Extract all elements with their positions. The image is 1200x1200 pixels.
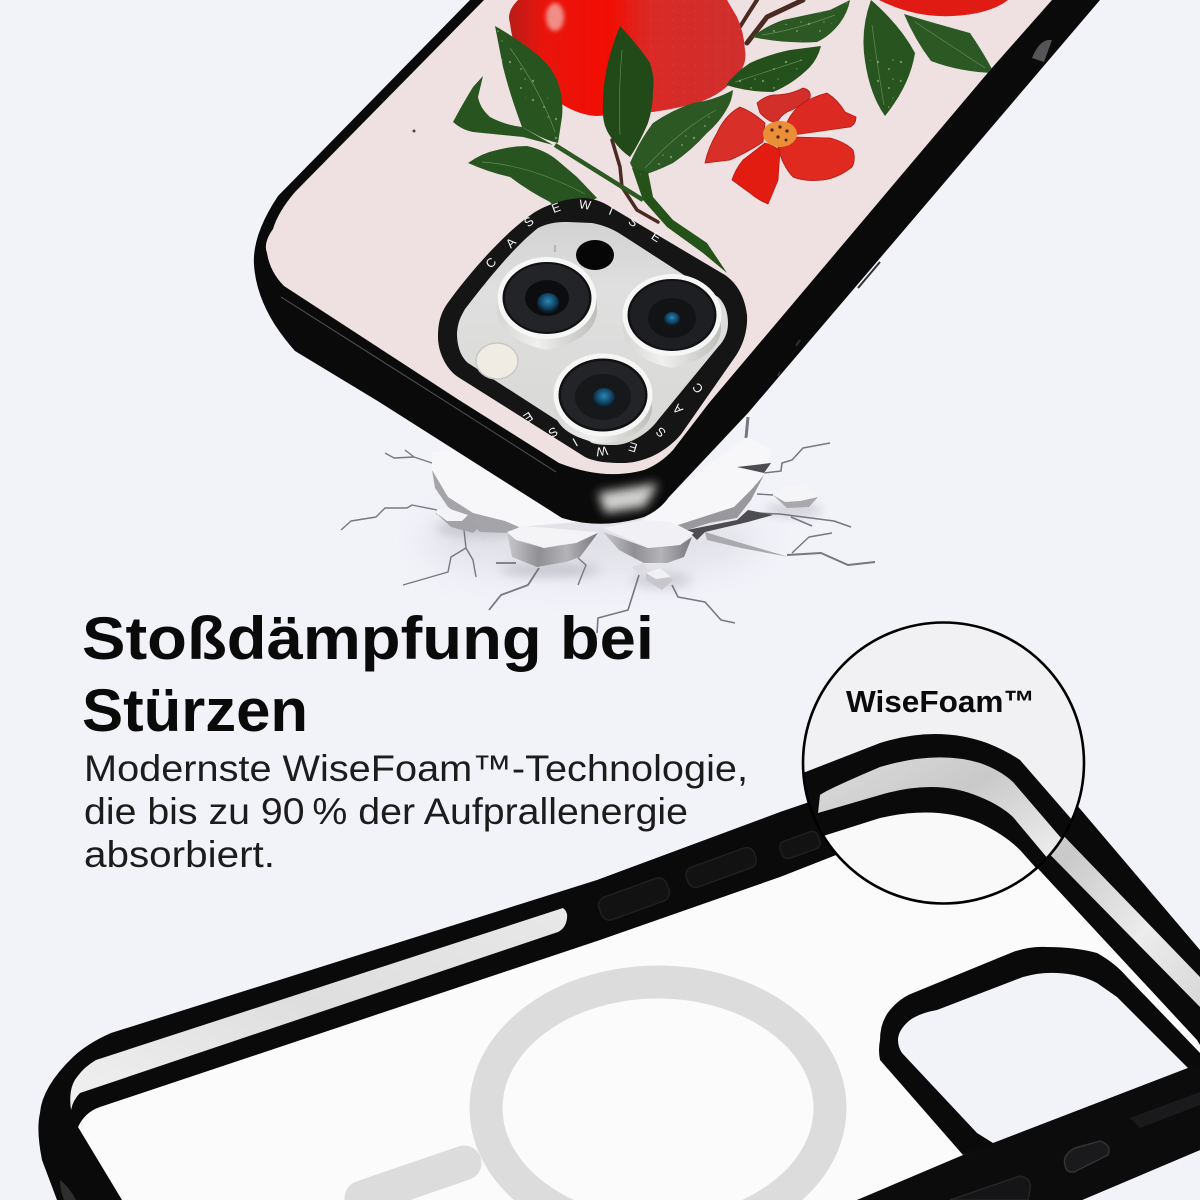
floor slab: upper left xyxy=(432,440,600,527)
leaf speckle xyxy=(495,0,915,177)
fruit grain xyxy=(628,2,740,110)
leaf curled left xyxy=(453,76,553,145)
petal lower right xyxy=(778,137,854,181)
microphone hole xyxy=(576,240,614,270)
petal top xyxy=(757,88,810,123)
upper phone with case xyxy=(254,0,1100,524)
camera cutout rim xyxy=(879,947,1200,1155)
case black frame silhouette xyxy=(38,760,1200,1200)
leaf upper left xyxy=(495,26,562,143)
camera plate mark xyxy=(554,245,556,252)
bottom button xyxy=(950,1176,1030,1200)
callout: magnified WiseFoam rim xyxy=(802,621,1086,905)
petal upper right xyxy=(787,93,856,135)
frame edge shine xyxy=(281,297,556,472)
CASEWISE ring lettering: C xyxy=(690,380,706,396)
CASEWISE ring lettering: C xyxy=(483,255,499,271)
CASEWISE ring lettering: W xyxy=(578,197,592,213)
fruit highlight xyxy=(546,3,564,31)
stem leaf xyxy=(632,168,727,273)
leaf veins xyxy=(482,15,985,194)
phone metal camera plate xyxy=(457,222,728,445)
petal left xyxy=(705,107,765,163)
pomegranate fruit xyxy=(509,0,746,116)
body text: absorbiert. xyxy=(84,834,275,875)
CASEWISE ring lettering: S xyxy=(521,214,537,230)
slab broken edge left xyxy=(432,470,519,533)
leaf top right xyxy=(752,0,850,42)
CASEWISE ring lettering: E xyxy=(627,439,639,455)
second fruit xyxy=(879,0,1008,16)
callout disc xyxy=(804,623,1084,903)
leaf right xyxy=(726,46,821,92)
small chunks bottom xyxy=(632,563,673,590)
case black frame xyxy=(254,0,1100,524)
body text xyxy=(84,748,748,875)
frame highlight at corner xyxy=(598,483,658,513)
heading xyxy=(82,605,654,744)
heading: Stoßdämpfung bei xyxy=(82,605,654,672)
chunk left small xyxy=(435,507,478,533)
flower xyxy=(705,88,856,204)
MagSafe ring xyxy=(486,982,830,1200)
floral artwork xyxy=(412,0,1008,273)
tiny print fleck xyxy=(412,130,416,132)
main green stem xyxy=(555,145,643,200)
flower centre xyxy=(763,121,797,147)
leaf centre xyxy=(603,26,654,157)
side slot xyxy=(60,1180,76,1200)
floor slab: upper right xyxy=(640,437,771,525)
clear case with MagSafe xyxy=(38,760,1200,1200)
leaf far right xyxy=(863,0,915,116)
MagSafe orientation pill xyxy=(362,1163,464,1198)
leaves xyxy=(453,0,994,273)
clear back panel xyxy=(78,830,1200,1200)
volume buttons xyxy=(596,830,822,923)
chunk centre right xyxy=(603,520,694,563)
CASEWISE ring lettering: A xyxy=(503,235,519,251)
lens three xyxy=(554,356,652,444)
CASEWISE ring lettering: I xyxy=(570,435,580,449)
side details xyxy=(778,262,880,376)
dark wedges xyxy=(687,463,773,540)
cracked floor impact xyxy=(341,417,875,633)
printed pink back xyxy=(266,0,1052,474)
CASEWISE ring lettering: E xyxy=(550,200,562,216)
heading: Stürzen xyxy=(82,677,308,744)
callout outline xyxy=(803,622,1084,904)
callout label: WiseFoam™ xyxy=(846,684,1035,719)
lens one xyxy=(497,260,597,350)
leaf lower left xyxy=(468,146,597,204)
magnified case rim xyxy=(804,734,1071,868)
CASEWISE ring lettering: A xyxy=(670,401,686,417)
body text: die bis zu 90 % der Aufprallenergie xyxy=(84,791,688,832)
body text: Modernste WiseFoam™-Technologie, xyxy=(84,748,748,789)
stamens xyxy=(770,125,789,141)
CASEWISE ring lettering: E xyxy=(521,409,535,425)
stems xyxy=(612,0,803,222)
corner sheen xyxy=(1130,1092,1200,1128)
CASEWISE ring lettering: I xyxy=(607,204,615,218)
bottom port pill xyxy=(1064,1141,1109,1172)
petal bottom xyxy=(732,143,780,204)
camera cutout opening xyxy=(898,973,1188,1143)
leaf lower right xyxy=(630,90,733,177)
side button glint xyxy=(1032,40,1052,62)
impact shadows xyxy=(420,503,822,589)
CASEWISE ring lettering: E xyxy=(649,229,663,245)
crack wedge xyxy=(705,532,789,557)
slab broken edge right xyxy=(678,475,764,530)
lens two xyxy=(623,276,721,368)
bottom edge band xyxy=(857,1063,1200,1200)
flash xyxy=(476,343,518,379)
chunk centre left xyxy=(507,526,598,567)
clear side gap left xyxy=(70,908,567,1110)
CASEWISE ring lettering: S xyxy=(546,424,560,440)
camera island ring xyxy=(438,198,747,463)
CASEWISE ring lettering xyxy=(483,197,706,459)
pebble right xyxy=(773,485,818,508)
crack lines xyxy=(341,417,875,633)
CASEWISE ring lettering: W xyxy=(595,443,609,459)
clear side gap right xyxy=(1000,770,1200,1007)
CASEWISE ring lettering: S xyxy=(626,214,640,230)
leaf far right tip xyxy=(904,14,994,73)
CASEWISE ring lettering: S xyxy=(653,424,669,440)
